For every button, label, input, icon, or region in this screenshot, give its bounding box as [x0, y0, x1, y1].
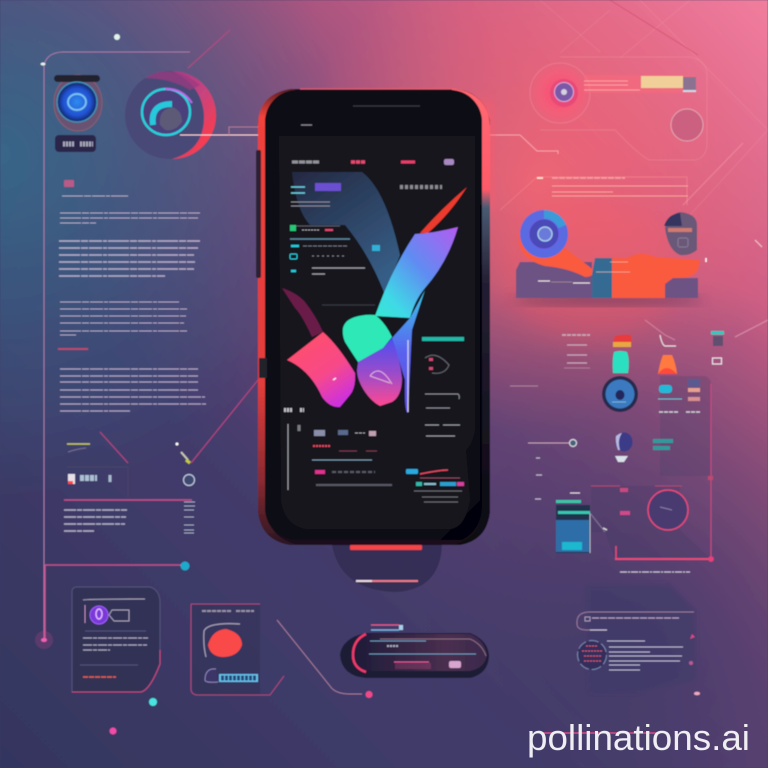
node and blue ball [528, 432, 673, 499]
left connector frame [40, 30, 230, 640]
screen right widgets [422, 337, 464, 436]
paragraph with pink rule [64, 500, 195, 533]
panel: card centre with red blob [191, 604, 284, 695]
panel: bottom right chart [556, 486, 714, 572]
screen header [292, 159, 454, 187]
text block with frame [500, 143, 743, 210]
icon: blue orb [602, 376, 638, 412]
phone glow [472, 100, 494, 210]
diagonal connectors [100, 380, 258, 463]
phone stand shadow [332, 545, 442, 592]
pill widget [340, 625, 489, 678]
phone screen [279, 136, 475, 529]
screen bottom data [284, 410, 464, 502]
panel: top right card [490, 57, 707, 160]
chart ribbon: translucent blue [292, 172, 400, 295]
icon: dark device [664, 212, 697, 255]
connector lines bottom [277, 620, 700, 698]
panel: orange and blue dashboard [513, 210, 703, 306]
feature list [510, 335, 590, 386]
phone body [256, 89, 490, 550]
panel: right stats [658, 376, 713, 558]
watermark: pollinations.ai [527, 717, 750, 758]
small stats block [67, 444, 128, 498]
panel: bottom right dark list [577, 585, 695, 692]
decorative dots [110, 698, 157, 734]
icon label [55, 135, 96, 152]
chart: left labels [290, 183, 380, 305]
right panel glow [500, 200, 680, 340]
left text column [58, 180, 206, 411]
connector to phone [180, 127, 258, 135]
small marks right [645, 240, 768, 340]
icon: colored pills [613, 331, 724, 374]
chart: check mark [282, 187, 467, 413]
panel: card left [72, 587, 160, 692]
small tag icon [64, 180, 74, 187]
pink connector with nodes [35, 562, 190, 649]
icon: large lens [125, 71, 216, 159]
icon: blue app button [54, 75, 102, 131]
phone [256, 89, 494, 592]
small marker icons [176, 442, 194, 486]
